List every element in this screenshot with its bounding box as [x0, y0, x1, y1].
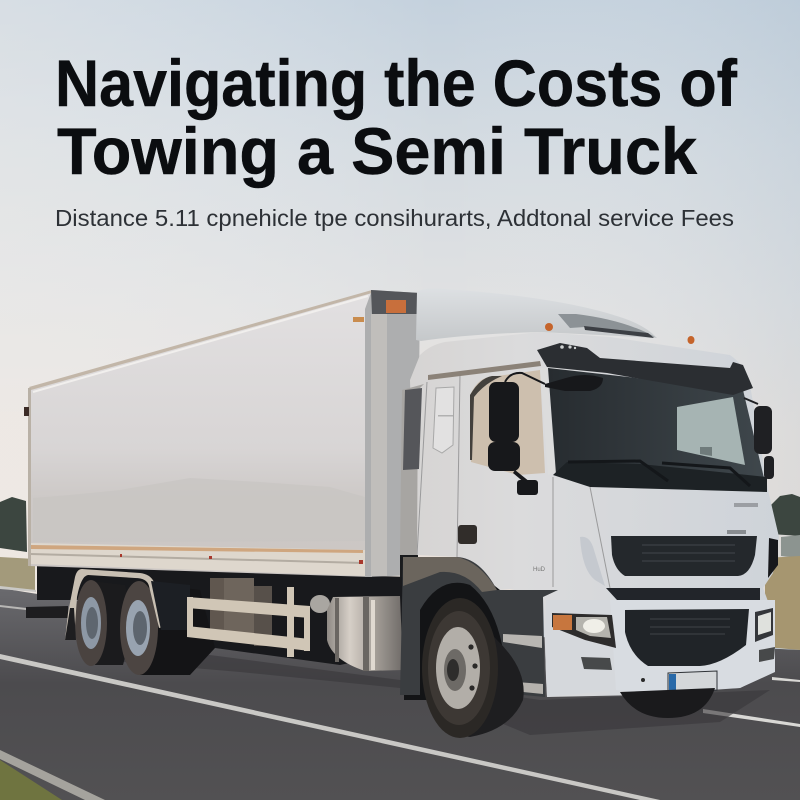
tree lines on horizon: [0, 494, 800, 558]
wheel arch: [400, 557, 558, 697]
title: Navigating the Costs of: [55, 46, 738, 120]
box reflection: [33, 478, 365, 542]
fuel tank: [310, 595, 403, 671]
roof trim strip: [428, 361, 541, 380]
bumper divider: [606, 588, 760, 600]
windshield highlight: [677, 397, 745, 465]
chassis underside: [37, 566, 410, 665]
fender recess and badges: [580, 503, 778, 586]
roadside grass: [0, 556, 800, 650]
right-side mirror: [744, 398, 774, 479]
rear mudguard: [65, 569, 163, 640]
orange roof markers: [545, 323, 694, 344]
windshield: [548, 368, 767, 492]
left headlight: [552, 613, 616, 648]
lower grille: [625, 609, 749, 666]
side underrun guard: [187, 587, 310, 657]
front right wheel: [620, 688, 715, 718]
left-side mirror: [488, 373, 603, 495]
wipers: [568, 461, 750, 486]
wheel well: [404, 570, 508, 700]
side vent: [400, 384, 454, 555]
door handle: [458, 525, 477, 544]
sky background: [0, 0, 800, 600]
rear dual wheels: [75, 580, 215, 675]
road markings: [0, 654, 660, 800]
trailer front post: [365, 290, 420, 577]
trailer box: [24, 290, 372, 577]
roof vent: [558, 314, 655, 337]
right headlight: [755, 608, 773, 642]
front left wheel: [422, 598, 524, 738]
truck shadow: [100, 655, 770, 735]
fog lights: [581, 657, 612, 670]
title second line: Towing a Semi Truck: [57, 114, 697, 188]
rear bumper: [26, 606, 68, 618]
cab body: [410, 332, 779, 697]
door seams and side panel: [417, 375, 610, 588]
marker lights: [120, 554, 363, 564]
lower cowl: [553, 462, 767, 492]
cab roof fairing: [416, 288, 657, 341]
license plate: [668, 671, 717, 692]
lower trim: [31, 543, 365, 576]
semi truck: [24, 288, 779, 738]
lower bumper: [545, 600, 775, 697]
road: [0, 586, 800, 800]
fender mirror text: HuD: [533, 567, 546, 573]
upper grille: [611, 536, 757, 576]
dark sun visor: [537, 343, 753, 395]
subtitle: Distance 5.11 cpnehicle tpe consihurarts, Addtonal service Fees: [55, 205, 734, 231]
side window: [470, 368, 556, 475]
side equipment boxes: [210, 578, 272, 646]
